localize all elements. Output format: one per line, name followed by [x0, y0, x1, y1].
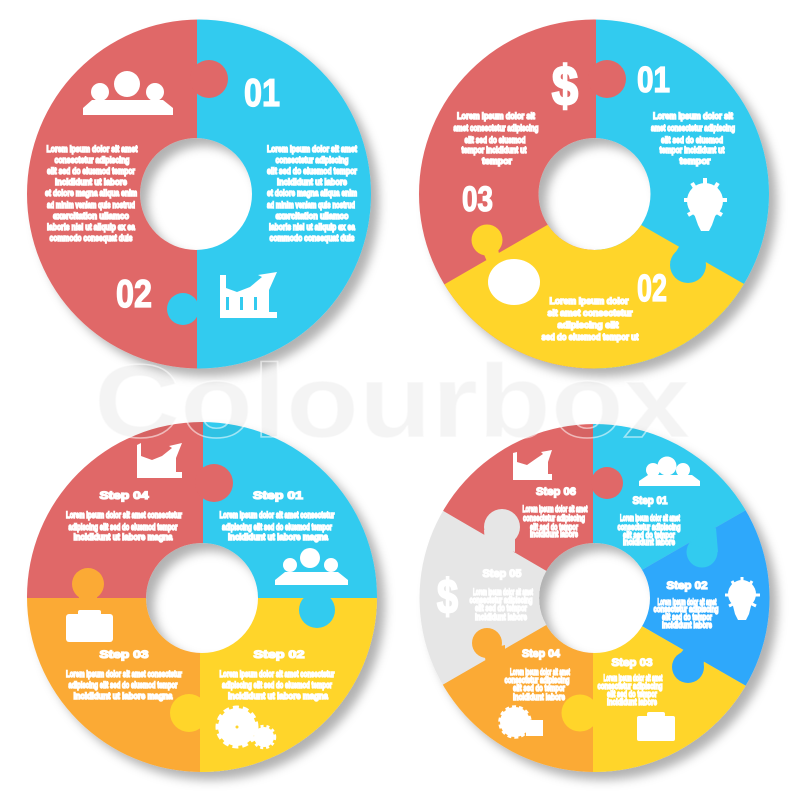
- text block left: et dolore magna aliqua enim: [45, 188, 137, 199]
- knob: blue into yellow: [670, 246, 706, 283]
- text block left: [45, 144, 138, 244]
- text block red: [454, 111, 539, 167]
- icon: chart: [137, 443, 182, 478]
- text block gray: [470, 587, 533, 623]
- panel: six-piece puzzle ring: Lorem ipsum dolor sit amet: [473, 587, 533, 598]
- text block orange: adipiscing elit sed do eiusmod tempor: [68, 680, 178, 691]
- icon: chart: [220, 272, 277, 318]
- icon: dollar: $: [552, 54, 578, 117]
- text block blue: incididunt ut labore magna: [228, 532, 329, 543]
- text block yellow: incididunt ut labore magna: [228, 691, 329, 702]
- number 03: 03: [462, 180, 493, 219]
- text block right: ad minim veniam quis nostrud: [267, 200, 355, 211]
- number 01: 01: [637, 59, 670, 100]
- icon: chart: [513, 450, 552, 480]
- text block orange: consectetur adipiscing: [504, 675, 570, 686]
- knob: yellow into orange: [562, 694, 593, 732]
- text block red: amet consectetur adipiscing: [454, 123, 539, 134]
- text block dark blue: incididunt labore: [662, 620, 712, 631]
- text block gray: consectetur adipiscing: [470, 595, 533, 606]
- text block red: Lorem ipsum dolor sit amet: [522, 504, 588, 515]
- piece: orange bottom left: [27, 598, 214, 786]
- text block blue: adipiscing elit sed do eiusmod tempor: [222, 522, 332, 533]
- text block yellow: sit amet consectetur: [548, 308, 633, 319]
- icon: round badge: [488, 259, 540, 305]
- text block red: [522, 504, 588, 540]
- piece: red left half: [27, 20, 211, 382]
- text block yellow: elit sed do tempor: [607, 689, 657, 700]
- step label dark blue: Step 02: [666, 580, 708, 592]
- panel: six-piece puzzle ring: Lorem ipsum dolor sit amet: [510, 667, 570, 678]
- piece: blue right half: [197, 20, 385, 381]
- icon: briefcase: [637, 712, 675, 741]
- text block blue: Lorem ipsum dolor sit amet consectetur: [220, 510, 335, 521]
- text block left: consectetur adipiscing: [54, 155, 130, 166]
- text block dark blue: [654, 597, 719, 631]
- text block yellow: adipiscing elit sed do eiusmod tempor: [222, 680, 332, 691]
- knob: blue into red: [167, 293, 199, 325]
- knob: yellow into red: [472, 224, 502, 260]
- text block red: [66, 510, 182, 543]
- piece: orange: [442, 625, 607, 786]
- text block gray: elit sed do tempor: [475, 603, 527, 614]
- text block blue: elit sed do tempor: [623, 530, 675, 541]
- panel: six-piece puzzle ring: Lorem ipsum dolor sit amet: [620, 513, 680, 524]
- knob: red into blue: [591, 467, 623, 499]
- text block blue: consectetur adipiscing: [618, 522, 681, 533]
- text block left: incididunt ut labore: [55, 177, 127, 188]
- number 02: 02: [116, 273, 152, 316]
- step 03 label: Step 03: [100, 649, 148, 661]
- icon: gears: [217, 707, 275, 748]
- text block dark blue: elit sed do tempor: [662, 612, 712, 623]
- number 01: 01: [244, 72, 280, 115]
- step 01 label: Step 01: [253, 490, 303, 502]
- text block blue: amet consectetur adipiscing: [651, 123, 735, 134]
- knob: orange into red: [72, 568, 104, 600]
- text block red: elit sed do tempor: [530, 522, 578, 533]
- text block orange: [504, 667, 570, 703]
- piece: blue top right: [203, 400, 400, 598]
- panel: six-piece puzzle ring: Lorem ipsum dolor sit amet: [658, 597, 717, 608]
- text block yellow: incididunt labore: [607, 697, 657, 708]
- text block right: elit sed do eiusmod tempor: [267, 166, 357, 177]
- text block yellow: [220, 669, 335, 702]
- step 04 label: Step 04: [100, 490, 150, 502]
- text block right: laboris nisi ut aliquip ex ea: [269, 222, 356, 233]
- text block blue: Lorem ipsum dolor sit: [653, 111, 734, 122]
- panel: six-piece puzzle ring: [420, 424, 784, 786]
- text block orange: [66, 669, 182, 702]
- text block red: Lorem ipsum dolor sit: [457, 111, 536, 122]
- panel: four-piece puzzle ring: [27, 422, 391, 786]
- text block red: Lorem ipsum dolor sit amet consectetur: [66, 510, 182, 521]
- knob: red into blue: [596, 60, 626, 98]
- icon: people: [639, 456, 700, 486]
- text block left: Lorem ipsum dolor sit amet: [46, 144, 138, 155]
- knob: gray into red: [484, 509, 520, 552]
- knob: yellow into orange: [170, 694, 200, 732]
- piece: red top left: [27, 422, 216, 612]
- text block right: et dolore magna aliqua enim: [267, 188, 357, 199]
- icon: people: [275, 548, 348, 585]
- piece: yellow bottom: [444, 224, 744, 368]
- step label orange: Step 04: [522, 648, 561, 660]
- text block yellow: adipiscing elit: [558, 320, 619, 331]
- text block right: commodo consequat duis: [270, 233, 354, 244]
- piece: gray: [420, 511, 558, 695]
- text block red: consectetur adipiscing: [523, 513, 585, 524]
- icon: light bulb: [725, 577, 760, 620]
- piece: blue: [593, 424, 757, 580]
- piece: yellow bottom right: [200, 598, 390, 786]
- text block orange: Lorem ipsum dolor sit amet consectetur: [66, 669, 182, 680]
- watermark: Colourbox: [94, 344, 690, 460]
- panel: six-piece puzzle ring: Lorem ipsum dolor sit amet: [604, 673, 663, 684]
- text block left: laboris nisi ut aliquip ex ea: [47, 222, 136, 233]
- text block red: incididunt labore: [530, 529, 578, 540]
- knob: orange into gray: [472, 628, 505, 660]
- text block yellow: [598, 673, 663, 708]
- text block blue: [220, 510, 335, 543]
- text block right: consectetur adipiscing: [276, 155, 349, 166]
- knob: blue into yellow: [299, 598, 335, 628]
- text block blue: tempor incididunt ut: [660, 145, 725, 156]
- text block red: tempor incididunt ut: [462, 145, 527, 156]
- piece: yellow: [593, 626, 757, 786]
- text block orange: elit sed do tempor: [513, 683, 565, 694]
- knob: blue into dark blue: [686, 528, 718, 568]
- icon: gears: [500, 706, 543, 738]
- text block blue: incididunt labore: [623, 537, 675, 548]
- piece: dark blue: [642, 510, 784, 697]
- text block red: tempor: [482, 156, 512, 167]
- knob: red into blue: [203, 464, 233, 502]
- knob: red into blue: [197, 60, 228, 98]
- text block left: commodo consequat duis: [50, 233, 132, 244]
- text block gray: incididunt labore: [475, 612, 527, 623]
- text block yellow: Lorem ipsum dolor sit amet consectetur: [220, 669, 335, 680]
- text block yellow: [542, 296, 639, 343]
- text block right: Lorem ipsum dolor sit amet: [267, 144, 358, 155]
- step label yellow: Step 03: [612, 657, 652, 669]
- text block red: incididunt ut labore magna: [74, 532, 173, 543]
- piece: blue right: [596, 20, 783, 368]
- icon: dollar: $: [437, 571, 458, 624]
- text block left: elit sed do eiusmod tempor: [47, 166, 135, 177]
- piece: red: [443, 424, 606, 582]
- text block orange: incididunt labore: [513, 692, 565, 703]
- text block dark blue: consectetur adipiscing: [654, 604, 719, 615]
- text block right: [267, 144, 358, 244]
- step 02 label: Step 02: [254, 649, 304, 661]
- text block right: exercitation ullamco: [276, 211, 349, 222]
- piece: red left: [419, 20, 610, 368]
- panel: two-piece puzzle ring: [27, 20, 385, 382]
- step label gray: Step 05: [482, 568, 522, 580]
- text block red: adipiscing elit sed do eiusmod tempor: [68, 522, 178, 533]
- text block right: incididunt ut labore: [277, 177, 347, 188]
- text block blue: [618, 513, 681, 548]
- number 02: 02: [637, 268, 667, 310]
- panel: three-piece puzzle ring: [419, 20, 783, 382]
- text block red: elit sed do eiusmod: [464, 135, 526, 146]
- icon: light bulb: [684, 178, 727, 231]
- text block blue: [651, 111, 735, 167]
- text block orange: incididunt ut labore magna: [74, 691, 173, 702]
- text block left: exercitation ullamco: [53, 211, 129, 222]
- step label red: Step 06: [536, 486, 576, 498]
- icon: briefcase: [66, 610, 113, 642]
- text block yellow: sed do eiusmod tempor ut: [542, 332, 639, 343]
- text block blue: elit sed do eiusmod: [661, 135, 723, 146]
- icon: people: [83, 71, 173, 115]
- text block blue: tempor: [680, 156, 711, 167]
- text block yellow: Lorem ipsum dolor: [550, 296, 629, 307]
- text block yellow: consectetur adipiscing: [598, 681, 663, 692]
- knob: dark blue into yellow: [672, 648, 704, 683]
- text block left: ad minim veniam quis nostrud: [47, 200, 135, 211]
- step label blue: Step 01: [632, 495, 668, 507]
